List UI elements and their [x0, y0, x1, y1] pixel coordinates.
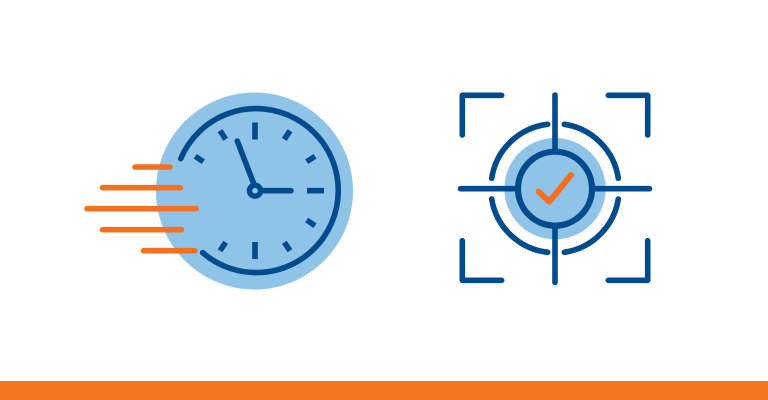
corner brackets: [462, 95, 648, 280]
orange checkmark: [539, 175, 571, 202]
clock background circle: [156, 92, 353, 290]
outer target arcs: [492, 124, 618, 252]
icon: fast clock: [87, 92, 353, 290]
clock hands: [237, 141, 291, 191]
crosshair lines: [460, 95, 650, 282]
orange footer bar: [0, 381, 768, 400]
target background circle: [504, 138, 606, 239]
clock hour ticks: [195, 122, 324, 259]
clock rim: [181, 109, 338, 273]
clock centre pin: [250, 185, 260, 196]
orange speed lines: [87, 167, 196, 251]
inner target ring: [518, 152, 592, 226]
icon: target with checkmark: [460, 95, 650, 282]
